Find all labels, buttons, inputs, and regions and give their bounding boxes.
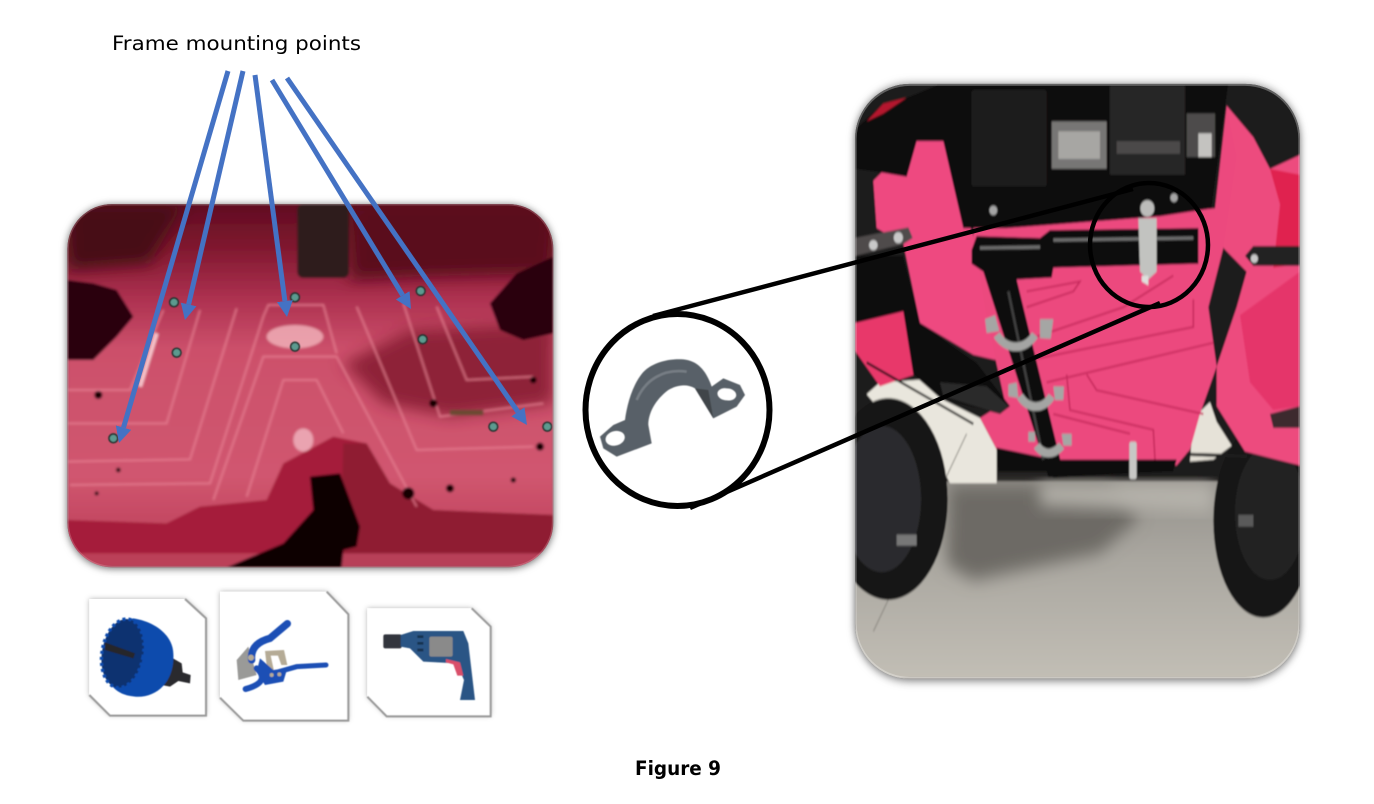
cutter handles xyxy=(246,624,326,689)
icon: metal clamps xyxy=(985,200,1157,453)
icon: electric drill card xyxy=(367,608,491,716)
icon: grey pipe clamp xyxy=(600,359,745,457)
panel: right photo of vehicle underside xyxy=(829,84,1313,679)
icon: hole saw card xyxy=(89,599,206,716)
callout: detail circle with pipe clamp xyxy=(586,314,770,506)
callout: zoom lines from detail circle to pipe clamp xyxy=(653,189,1160,508)
heading: frame mounting points: Frame mounting points xyxy=(112,32,361,55)
icon: black PVC pipe xyxy=(972,228,1198,477)
icon: mounting screws xyxy=(109,287,552,443)
icon: right wheel xyxy=(1212,442,1300,619)
arrows: pointers to frame mounting points xyxy=(124,71,518,428)
icon: pipe cutter card xyxy=(220,592,348,721)
caption: figure 9: Figure 9 xyxy=(635,757,721,780)
callout: circle around clamp on vehicle xyxy=(1090,183,1208,307)
panel: left photo of seat underside xyxy=(67,204,553,567)
panel: tool cards xyxy=(89,592,491,721)
icon: left wheel xyxy=(855,396,948,602)
